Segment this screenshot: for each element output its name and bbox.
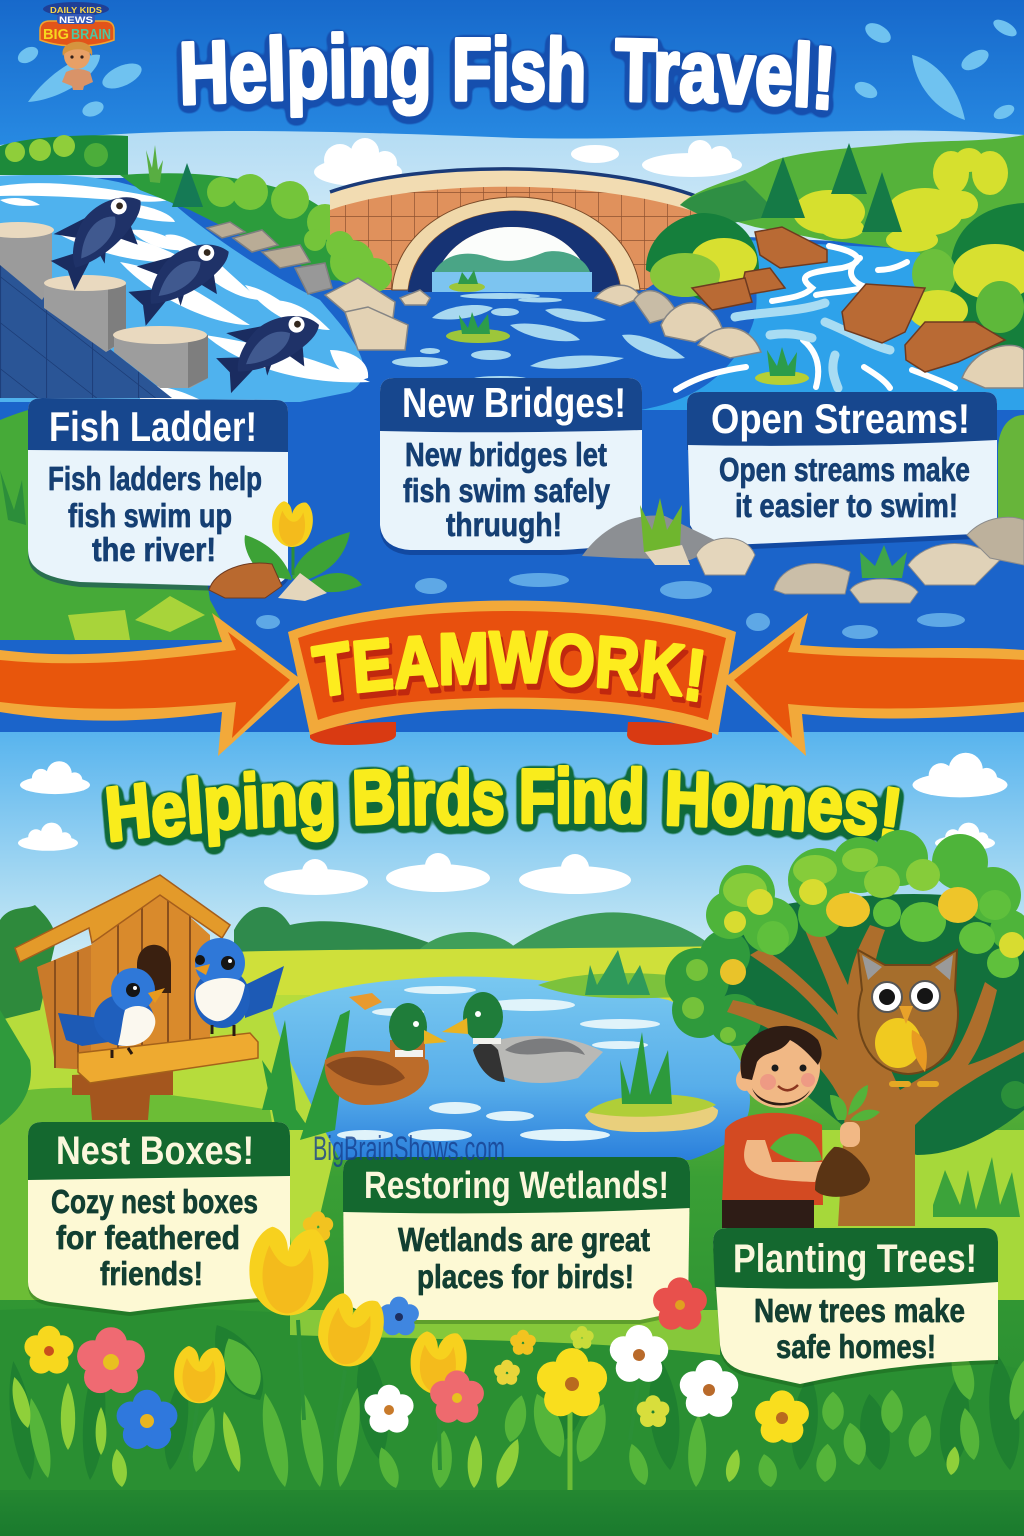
card: New Bridges: New bridges let xyxy=(405,436,607,473)
lower right canopy xyxy=(1001,1081,1024,1109)
card: Nest Boxes: for feathered xyxy=(56,1219,240,1256)
right meander foam xyxy=(676,246,955,390)
far island with reeds xyxy=(538,973,680,998)
lower sky background xyxy=(0,732,1024,960)
card: Open Streams: Open Streams! xyxy=(711,395,970,442)
title: Helping Birds Find Homes!: Birds xyxy=(351,754,505,841)
distant hills xyxy=(234,907,455,953)
title: Helping Birds Find Homes! xyxy=(102,754,906,859)
card: New Bridges: fish swim safely xyxy=(403,472,611,509)
brown duck xyxy=(325,1051,429,1105)
yellow meadow xyxy=(230,945,780,1040)
left canopy xyxy=(665,930,761,1046)
fish ladder wall xyxy=(0,262,172,398)
logo: Daily Kids News Big Brain xyxy=(40,2,114,90)
title: Helping Fish Travel!: Fish xyxy=(452,22,587,120)
card: Restoring Wetlands xyxy=(343,1157,690,1320)
left rapids xyxy=(0,175,364,402)
rapids white foam xyxy=(0,183,370,402)
flowers xyxy=(24,1211,809,1470)
card: Fish Ladder: fish swim up xyxy=(68,497,232,534)
right grass bank xyxy=(745,1130,1024,1300)
card: Nest Boxes: friends! xyxy=(100,1255,203,1292)
dark canopy back xyxy=(700,894,1024,1155)
reed islands xyxy=(446,270,809,385)
card: Restoring Wetlands: Restoring Wetlands! xyxy=(364,1165,669,1207)
card: Planting Trees xyxy=(713,1228,998,1384)
bridge side rocks xyxy=(325,278,1024,388)
card: Planting Trees: New trees make xyxy=(754,1292,965,1329)
card: Nest Boxes: Cozy nest boxes xyxy=(51,1183,258,1220)
distant sky xyxy=(0,131,1024,320)
far left bushes xyxy=(0,135,128,175)
title: Helping Fish Travel!: Helping xyxy=(178,17,432,123)
water splashes xyxy=(15,16,1019,122)
right river turquoise xyxy=(640,240,1024,410)
left arrow xyxy=(0,613,302,756)
owl xyxy=(858,950,958,1084)
bridge xyxy=(330,167,706,292)
card: Restoring Wetlands: Wetlands are great xyxy=(398,1221,650,1258)
nest box xyxy=(15,875,284,1120)
logo: Daily Kids News Big Brain: NEWS xyxy=(59,15,93,26)
left trees xyxy=(0,905,56,1020)
lime leaves xyxy=(7,1375,961,1491)
grass xyxy=(0,985,1024,1536)
logo: Daily Kids News Big Brain: DAILY KIDS xyxy=(50,5,102,15)
reeds by the ducks xyxy=(262,1010,350,1140)
top sky background xyxy=(0,0,1024,170)
card: New Bridges: thruugh! xyxy=(446,506,562,543)
right bank hills and yellow bushes xyxy=(680,135,1024,350)
calm river foam patches xyxy=(392,293,685,390)
title: Helping Birds Find Homes!: Helping xyxy=(102,755,337,857)
card: Restoring Wetlands: places for birds! xyxy=(417,1258,634,1295)
mid leaves xyxy=(23,1332,1024,1491)
banner: Teamwork: TEAMWORK! xyxy=(310,618,710,717)
bush beside bridge left xyxy=(326,231,392,292)
bright canopy top xyxy=(706,830,1024,953)
card: Fish Ladder xyxy=(28,398,288,587)
river scene panel xyxy=(0,131,1024,740)
right arrow xyxy=(722,613,1024,756)
card: Nest Boxes xyxy=(28,1122,290,1312)
watermark: BigBrainShows.com: BigBrainShows.com xyxy=(313,1130,505,1168)
wetland scene panel xyxy=(0,905,1024,1536)
bluebird left xyxy=(58,968,165,1058)
card: Open Streams xyxy=(687,392,997,545)
card: New Bridges xyxy=(380,378,642,550)
right bushes xyxy=(950,203,1024,350)
left bank green xyxy=(120,173,400,285)
sky clouds xyxy=(18,753,1007,895)
logo: Daily Kids News Big Brain: BRAIN xyxy=(71,27,111,43)
plant: yellow flower and rocks by fish ladder card xyxy=(209,501,362,601)
dark leaves xyxy=(3,1316,1024,1482)
card: Fish Ladder: Fish ladders help xyxy=(48,460,262,497)
left meadow xyxy=(0,995,340,1300)
card: Planting Trees: safe homes! xyxy=(776,1328,936,1365)
background dark foliage xyxy=(0,1307,1024,1490)
child planting a tree xyxy=(722,1026,880,1228)
river ripples xyxy=(256,573,965,639)
title: Helping Birds Find Homes!: Find xyxy=(519,754,645,840)
card: Open Streams: it easier to swim! xyxy=(735,487,958,524)
title: Helping Birds Find Homes!: Homes! xyxy=(664,755,906,859)
left green bank foreground xyxy=(0,400,232,640)
foreground flower meadow xyxy=(0,1307,1024,1491)
card: Planting Trees: Planting Trees! xyxy=(733,1237,977,1281)
pond xyxy=(273,977,750,1160)
bank stones xyxy=(207,222,332,294)
card: Open Streams: Open streams make xyxy=(719,451,970,488)
trunk and branches xyxy=(727,925,1024,1226)
grey duck xyxy=(473,1036,603,1083)
bluebird right xyxy=(194,938,284,1036)
card: Fish Ladder: the river! xyxy=(92,531,216,568)
duck island with reeds xyxy=(585,1096,718,1132)
clouds xyxy=(314,158,402,186)
rocks and plant by new bridges card xyxy=(582,498,755,575)
logo: Daily Kids News Big Brain: BIG xyxy=(43,27,69,43)
brown rocks xyxy=(692,227,1005,372)
right bank strip xyxy=(998,415,1024,520)
ducks xyxy=(325,992,603,1105)
right-side reeds xyxy=(933,1157,1020,1217)
fish ladder stone steps xyxy=(0,222,208,388)
bushes by the bridge xyxy=(646,213,759,300)
rocks and plant by open streams card xyxy=(774,517,1024,603)
oak tree xyxy=(665,830,1024,1226)
banner: Teamwork xyxy=(288,600,736,745)
title: Helping Fish Travel!: Travel! xyxy=(615,20,838,128)
card: New Bridges: New Bridges! xyxy=(402,379,626,426)
card: Nest Boxes: Nest Boxes! xyxy=(56,1129,254,1173)
title: Helping Fish Travel! xyxy=(178,17,838,128)
card: Fish Ladder: Fish Ladder! xyxy=(49,403,257,450)
fish jumping up the ladder xyxy=(39,181,331,394)
river water base xyxy=(0,178,1024,740)
